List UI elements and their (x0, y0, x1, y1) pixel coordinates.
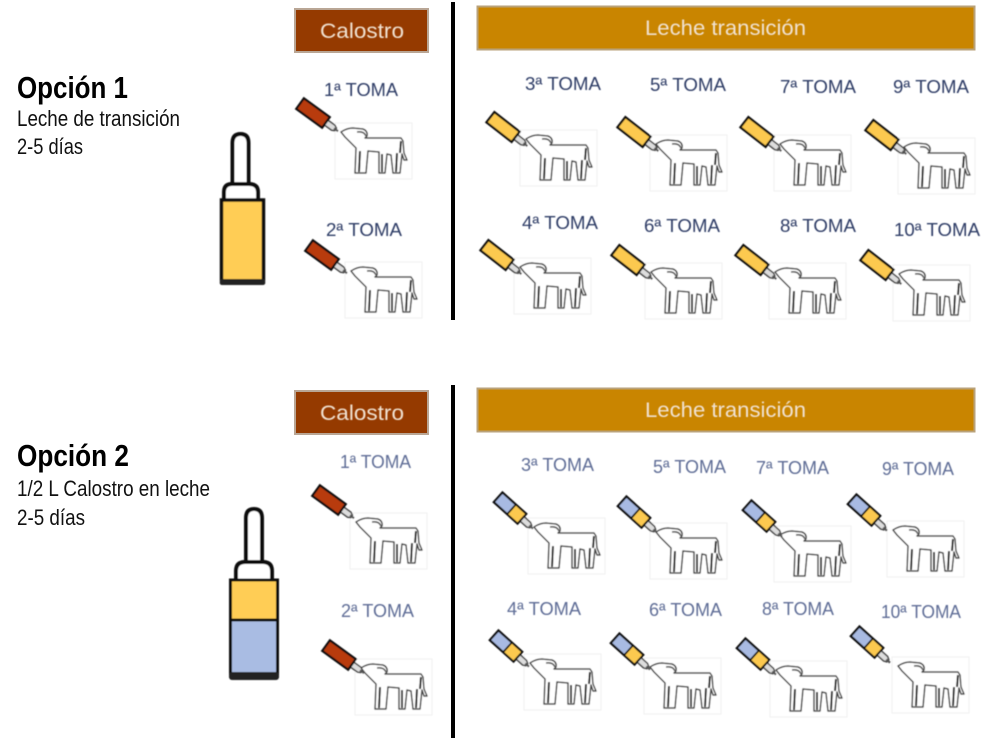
feeding: 8ª toma (737, 599, 847, 717)
divider (451, 385, 455, 738)
header: Leche transición (478, 388, 974, 432)
feeding: 2ª toma: 2ª TOMA (326, 220, 402, 240)
divider (451, 2, 455, 320)
feeding: 6ª toma: 6ª TOMA (644, 216, 720, 236)
feeding: 5ª toma (618, 457, 727, 579)
text: 2-5 días: 2-5 días (17, 134, 83, 159)
panel: opción 2 (17, 385, 974, 738)
feeding: 10ª toma (851, 602, 969, 713)
feeding: 3ª toma: 3ª TOMA (525, 74, 601, 94)
feeding: 7ª toma (743, 458, 851, 582)
text: Leche de transición: Leche de transición (17, 106, 180, 131)
header: Leche transición (478, 6, 974, 50)
feeding: 5ª toma: 5ª TOMA (653, 457, 726, 477)
feeding: 3ª toma (486, 74, 601, 186)
feeding: 1ª toma (296, 80, 412, 179)
header: Leche transición: Leche transición (645, 399, 806, 422)
text: 1/2 L Calostro en leche: 1/2 L Calostro en leche (17, 476, 210, 501)
feeding: 6ª toma: 6ª TOMA (649, 600, 722, 620)
feeding: 8ª toma: 8ª TOMA (780, 216, 856, 236)
header: Leche transición: Leche transición (645, 17, 806, 40)
feeding: 6ª toma (611, 600, 722, 714)
feeding: 5ª toma (617, 75, 727, 191)
feeding: 10ª toma (860, 220, 980, 321)
feeding: 9ª toma: 9ª TOMA (893, 77, 969, 97)
feeding: 4ª toma: 4ª TOMA (507, 599, 581, 619)
feeding: 9ª toma (848, 459, 964, 577)
feeding: 5ª toma: 5ª TOMA (650, 75, 726, 95)
feeding: 1ª toma: 1ª TOMA (324, 80, 398, 100)
feeding: 2ª toma: 2ª TOMA (341, 601, 414, 621)
feeding: 2ª toma (322, 601, 432, 715)
feeding: 4ª toma (490, 599, 601, 710)
feeding: 9ª toma (865, 77, 975, 194)
feeding: 8ª toma (735, 216, 856, 319)
feeding: 8ª toma: 8ª TOMA (762, 599, 834, 619)
feeding: 10ª toma: 10ª TOMA (894, 220, 980, 240)
heading: Opción 1: Opción 1 (17, 70, 128, 105)
panel: opción 1 (17, 2, 980, 321)
feeding: 3ª toma: 3ª TOMA (521, 455, 594, 475)
feeding: 7ª toma (740, 77, 856, 191)
feeding: 10ª toma: 10ª TOMA (881, 602, 961, 622)
icon: large yellow bottle (220, 134, 265, 285)
feeding: 4ª toma (480, 213, 598, 314)
feeding: 3ª toma (494, 455, 605, 574)
text: 2-5 días: 2-5 días (17, 505, 85, 530)
feeding: 4ª toma: 4ª TOMA (522, 213, 598, 233)
header: Calostro (295, 9, 428, 52)
feeding: 7ª toma: 7ª TOMA (780, 77, 856, 97)
header: Calostro: Calostro (320, 402, 404, 425)
feeding: 1ª toma: 1ª TOMA (340, 452, 411, 472)
feeding: 2ª toma (305, 220, 422, 318)
header: Calostro (295, 391, 428, 434)
feeding: 6ª toma (611, 216, 722, 319)
feeding: 7ª toma: 7ª TOMA (756, 458, 829, 478)
feeding: 1ª toma (312, 452, 427, 569)
icon: large mixed bottle (229, 509, 279, 680)
header: Calostro: Calostro (320, 20, 404, 43)
heading: Opción 2: Opción 2 (17, 438, 129, 473)
feeding: 9ª toma: 9ª TOMA (882, 459, 954, 479)
